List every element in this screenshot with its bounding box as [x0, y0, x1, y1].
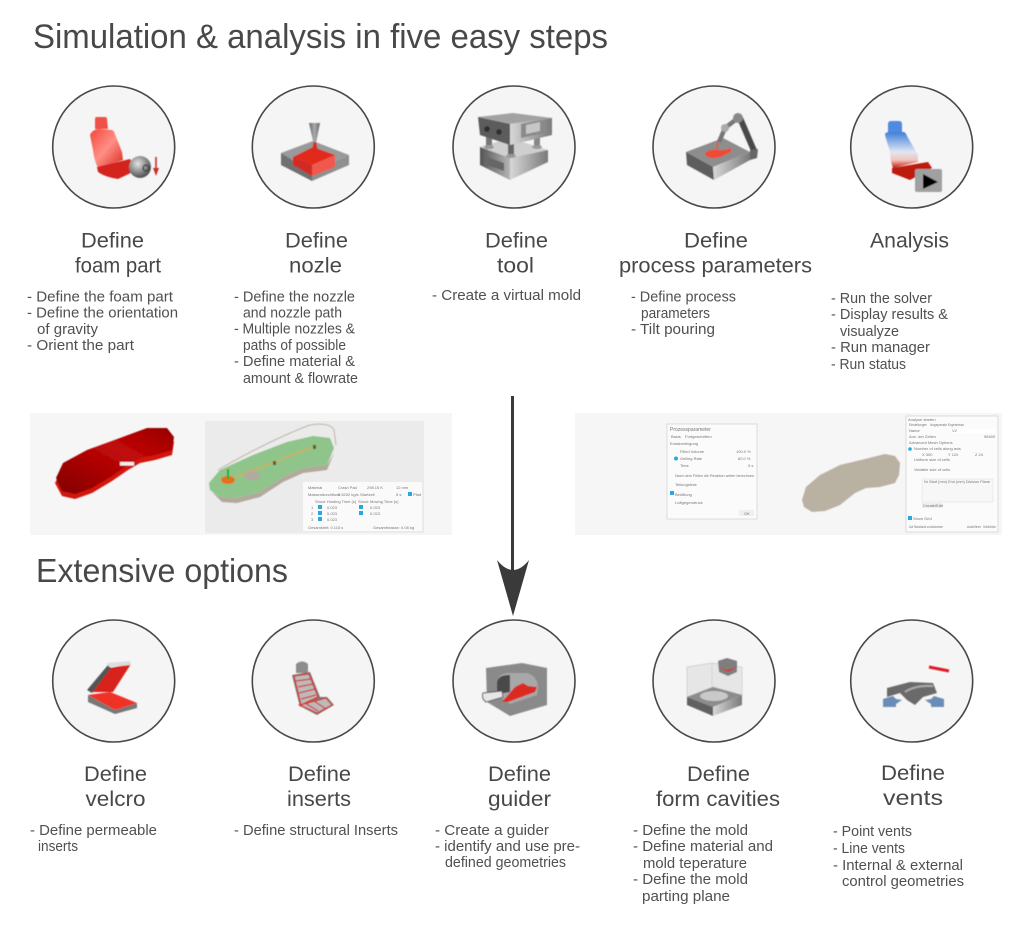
material table: Shoot [315, 499, 326, 504]
heading: process parameters [619, 254, 812, 278]
icon: part with vents [851, 620, 973, 742]
option: define form cavities [633, 620, 780, 905]
process parameter dialog [667, 424, 757, 519]
heading: nozle [289, 254, 342, 278]
material table: Moving Time (s) [370, 499, 399, 504]
heading [656, 762, 780, 811]
heading: Define [485, 228, 548, 252]
analysis dialog: Angepasste Ergebnisse [930, 422, 965, 427]
panel: left screenshots [30, 413, 452, 535]
process parameter dialog: Teilungslinie [675, 482, 698, 487]
heading: Define [684, 228, 748, 252]
analysis dialog: Uniform size of cells [914, 457, 950, 462]
analysis dialog: Z 24 [975, 452, 984, 457]
bullet list [833, 824, 964, 890]
bullet list [831, 291, 948, 373]
process parameter dialog: Filled Volume [680, 449, 705, 454]
icon: seat with inserts [252, 620, 374, 742]
bullet list: - Define material and [633, 839, 773, 855]
analysis dialog: Variable size of cells [914, 467, 950, 472]
heading: Define [687, 762, 750, 786]
analysis dialog [906, 416, 998, 532]
analysis dialog: Number of cells along axis [914, 446, 961, 451]
analysis dialog: Ausführen [967, 524, 981, 529]
material table: 0.023 [327, 505, 338, 510]
icon: mold tool [453, 86, 575, 208]
bullet list: - Run status [831, 357, 906, 373]
heading [287, 762, 351, 811]
heading [881, 761, 945, 810]
bullet list: defined geometries [445, 855, 566, 871]
process parameter dialog: Belüftung [675, 492, 692, 497]
analysis dialog: V2 [952, 428, 958, 433]
bullet list: - Define structural Inserts [234, 823, 398, 839]
bullet list: of gravity [37, 322, 99, 338]
bullet list: - Line vents [833, 841, 905, 857]
material table: 0.5202 kg/s [338, 492, 359, 497]
heading: Define [881, 761, 945, 785]
material table: 3 [311, 517, 314, 522]
bullet list: - Define the nozzle [234, 290, 355, 306]
material table: 12 mm [396, 485, 409, 490]
material table: Startzeit [360, 492, 376, 497]
material table: Gesamtzeit: 0.115 s [308, 525, 343, 530]
analysis dialog: Advanced Mesh Options [909, 440, 953, 445]
icon: robot arm pouring [653, 86, 775, 208]
material table: 0.023 [370, 511, 381, 516]
bullet list [435, 823, 580, 871]
bullet list: - Point vents [833, 824, 912, 840]
bullet list: - Run the solver [831, 291, 932, 307]
option: define guider [435, 620, 580, 871]
analysis dialog: Anz. der Zellen [909, 434, 936, 439]
bullet list: - Define the orientation [27, 306, 178, 322]
icon: velcro pads [53, 620, 175, 742]
bullet list: - Define process [631, 290, 736, 306]
bullet list: - Define material & [234, 354, 355, 370]
heading: Define [81, 228, 144, 252]
bullet list [30, 823, 157, 855]
analysis dialog: X 300 [922, 452, 933, 457]
bullet list: - Create a guider [435, 823, 549, 839]
material table: 5 s [396, 492, 401, 497]
heading [619, 228, 812, 278]
material table: 298.15 K [367, 485, 383, 490]
beige sole [802, 454, 900, 512]
bullet list [234, 290, 358, 387]
bullet list [631, 290, 736, 338]
material table: 0.023 [327, 511, 338, 516]
heading [488, 762, 551, 811]
step 3: define tool [432, 86, 581, 304]
analysis dialog: Show Grid [913, 516, 932, 521]
bullet list: inserts [38, 839, 78, 855]
arrow [497, 396, 529, 616]
bullet list: - Define the foam part [27, 290, 173, 306]
step 5: analysis [831, 86, 973, 373]
bullet list: - Orient the part [27, 338, 134, 354]
material table: 1 [311, 505, 314, 510]
bullet list: visualyze [840, 324, 899, 340]
heading: vents [883, 786, 943, 810]
analysis dialog: Auf Standards zurücksetzen [909, 524, 943, 529]
material table: Material [308, 485, 322, 490]
heading: Define [84, 762, 147, 786]
process parameter dialog: 0 s [748, 463, 753, 468]
process parameter dialog: Time [680, 463, 690, 468]
heading: velcro [86, 787, 146, 811]
analysis dialog: Einstellungen [909, 422, 927, 427]
bullet list: mold teperature [643, 856, 747, 872]
heading: form cavities [656, 787, 780, 811]
icon: red seat with gravity ball [53, 86, 175, 208]
icon: nozzle over red block [252, 86, 374, 208]
red foam sole [55, 428, 174, 499]
bullet list: paths of possible [243, 338, 346, 354]
bullet list: - Multiple nozzles & [234, 322, 355, 338]
bullet list [633, 823, 773, 905]
bullet list: control geometries [842, 874, 964, 890]
analysis dialog: Analyse starten [908, 417, 936, 422]
analysis dialog: 98400 [984, 434, 996, 439]
analysis dialog: Create/Edit [923, 503, 944, 508]
analysis dialog: Y 120 [948, 452, 959, 457]
bullet list: and nozzle path [243, 306, 342, 322]
bullet list: - Create a virtual mold [432, 288, 581, 304]
heading [485, 228, 548, 278]
process parameter dialog: Nach dem Füllen die Reaktion weiter berechnen [675, 473, 754, 478]
bullet list: amount & flowrate [243, 371, 358, 387]
icon: heat map seat with play button [851, 86, 973, 208]
icon: form cavity box [653, 620, 775, 742]
heading: Analysis [870, 228, 949, 252]
process parameter dialog: Basis [671, 434, 681, 439]
heading: Define [488, 762, 551, 786]
panel: right screenshots [575, 413, 1002, 535]
process parameter dialog: 100.0 % [736, 449, 751, 454]
process parameter dialog: Fortgeschritten [685, 434, 712, 439]
bullet list: - Internal & external [833, 858, 963, 874]
option: define inserts [234, 620, 398, 839]
material table: 2 [311, 511, 314, 516]
step 4: define process parameters [619, 86, 812, 338]
material table: Pfad [413, 492, 421, 497]
bullet list: - Display results & [831, 307, 948, 323]
heading: guider [488, 787, 551, 811]
bullet list: - Define permeable [30, 823, 157, 839]
bullet list: parting plane [642, 889, 730, 905]
bullet list: parameters [641, 306, 710, 322]
option: define velcro [30, 620, 175, 855]
analysis dialog: Nr Start (mm) End (mm) Division Plane [924, 479, 991, 484]
bullet list [27, 290, 178, 354]
material table: Gesamtmasse: 0.06 kg [373, 525, 414, 530]
analysis dialog: Name [909, 428, 920, 433]
title: Simulation & analysis in five easy steps [33, 18, 608, 56]
process parameter dialog: 60.0 % [738, 456, 751, 461]
section heading: extensive options: Extensive options [36, 552, 288, 589]
heading [75, 228, 161, 278]
step 2: define nozzle [234, 86, 374, 387]
heading [84, 762, 147, 811]
process parameter dialog: Gelling Rate [680, 456, 703, 461]
material table [303, 482, 422, 531]
material table: Crash Pad [338, 485, 357, 490]
option: define vents [833, 620, 973, 890]
analysis dialog: Schließen [983, 524, 996, 529]
bullet list: - Run manager [831, 340, 930, 356]
heading: inserts [287, 787, 351, 811]
heading: Define [288, 762, 351, 786]
material table: Massendurchfluss [308, 492, 340, 497]
icon: guider in box [453, 620, 575, 742]
bullet list: - identify and use pre- [435, 839, 580, 855]
process parameter dialog: Luftgegendruck [675, 500, 703, 505]
process parameter dialog: OK [744, 511, 750, 516]
heading: Define [285, 228, 348, 252]
heading: foam part [75, 254, 161, 278]
material table: 0.023 [370, 505, 381, 510]
heading [285, 228, 348, 278]
material table: 0.023 [327, 517, 338, 522]
material table: Holding Time (s) [327, 499, 357, 504]
bullet list: - Define the mold [633, 823, 748, 839]
nozzle screenshot [205, 421, 424, 533]
process parameter dialog: Endabedingung [670, 441, 698, 446]
bullet list: - Define the mold [633, 872, 748, 888]
step 1: define foam part [27, 86, 178, 354]
bullet list: - Tilt pouring [631, 322, 715, 338]
heading: tool [497, 254, 534, 278]
process parameter dialog: Prozessparameter [670, 427, 711, 433]
material table: Shoot [358, 499, 369, 504]
